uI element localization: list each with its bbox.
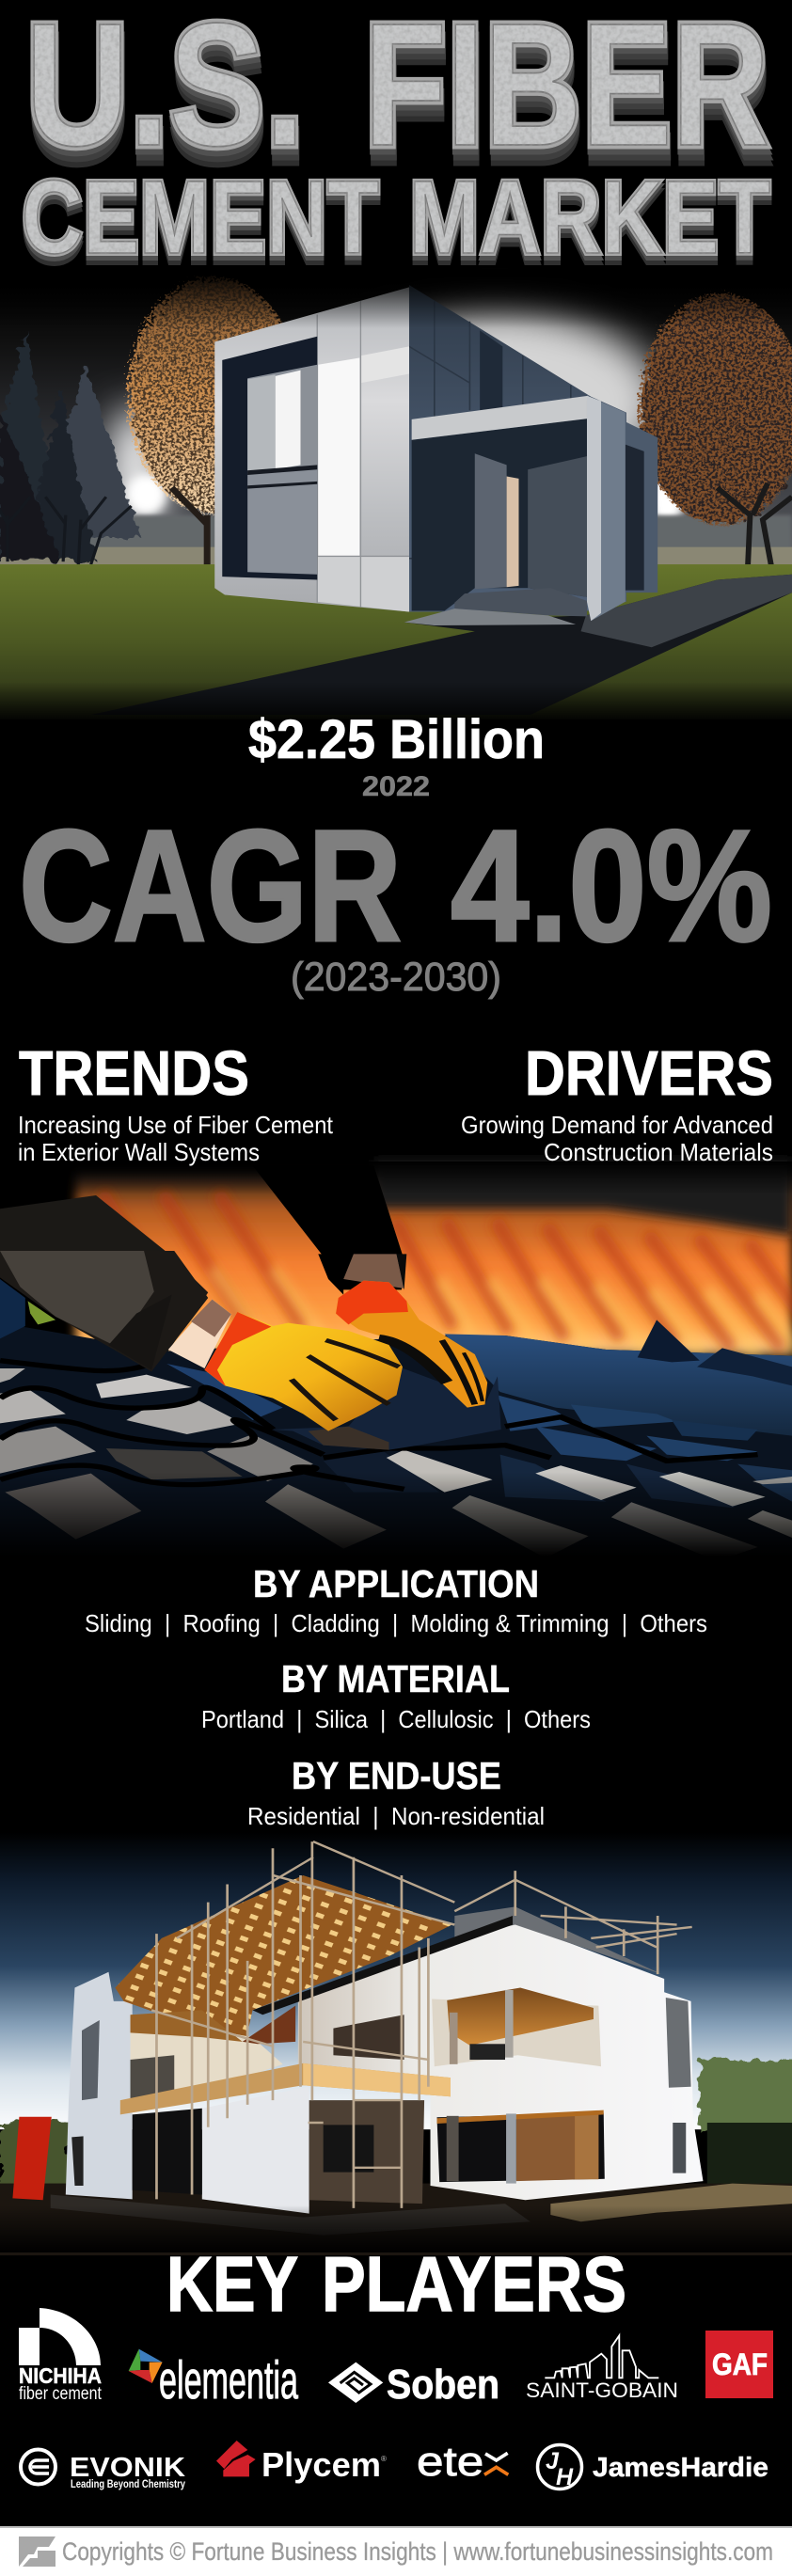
wooden roof lattice [115,1875,452,2044]
blue tiles [324,1395,792,1508]
segment: by material [201,1657,591,1733]
blue back roof [445,1334,792,1436]
porch interior [412,419,589,610]
top fade of roofer scene [0,1162,792,1194]
title line 1 [25,0,770,199]
logo: Plycem: ® [381,2455,387,2463]
key players heading: KEY [166,2240,298,2328]
logo: James Hardie: JamesHardie [593,2453,768,2483]
logo: Nichiha: fiber cement [19,2384,103,2404]
heading: BY END-USE [292,1754,501,1797]
right pillar [587,396,626,621]
title [22,0,770,285]
drivers block [461,1038,773,1166]
title line 2: CEMENT [22,160,379,276]
blue left scrap and hi-vis [0,1279,25,1338]
window glass [247,365,317,575]
main upper white mass [298,1922,704,2200]
logo: Evonik: Leading Beyond Chemistry [71,2479,185,2490]
light glow behind house [111,310,685,533]
scene: roofer with gloves [0,1161,792,1571]
logo: Evonik: EVONIK [70,2453,185,2483]
key players heading: PLAYERS [322,2240,626,2328]
title line 2 [22,160,770,285]
scene: fiber cement house [0,269,792,719]
window frame [222,337,317,580]
logo: James Hardie: H [556,2464,574,2490]
market size value: $2.25 Billion [248,709,545,770]
lower opening [437,2110,605,2184]
black tile wave lines [0,1361,758,1489]
center white panel [202,2087,309,2214]
drivers description [461,1111,773,1166]
items: Sliding | Roofing | Cladding | Molding & Trimming | Others [85,1609,707,1637]
ground [0,2184,792,2255]
sky [0,283,792,575]
key players heading [166,2240,626,2328]
top fade of scene [0,269,792,328]
right glove [336,1281,487,1408]
title line 2: CEMENT [22,165,379,280]
title line 1: U.S. [26,0,306,194]
mid interior [131,2006,404,2100]
segment: by end-use [247,1754,545,1830]
base year: 2022 [362,771,430,802]
logo: Etex: etex [417,2439,508,2485]
red panel [12,2117,52,2200]
drivers description: Growing Demand for Advanced [461,1111,773,1139]
blurred orange roof background [0,1161,792,1372]
blue side wall [409,285,626,611]
title line 2: CEMENT [22,160,379,276]
left orange tree [128,277,302,572]
right narrow windows [666,1998,691,2088]
ground trees [0,2060,792,2190]
trends description: Increasing Use of Fiber Cement [18,1111,334,1139]
trends heading: TRENDS [19,1038,249,1109]
left wrist [168,1300,231,1368]
canopy beam [412,396,589,440]
logo: Evonik [21,2449,185,2490]
bottom fade of building scene [0,2205,792,2252]
drivers description: Construction Materials [544,1138,773,1166]
lit tile highlights [0,1368,792,1561]
bare shrubs [0,497,132,565]
heading: BY MATERIAL [281,1657,510,1700]
CAGR value: CAGR [19,797,402,974]
logo: Nichiha [19,2308,103,2404]
door [475,453,507,589]
grass [0,564,792,719]
left sleeve close-up [0,1251,208,1371]
trends block [18,1038,334,1166]
items: Residential | Non-residential [247,1802,545,1830]
rear wing [626,421,657,593]
logo: Elementia: elementia [159,2350,298,2410]
logo: Plycem: Plycem [261,2445,381,2484]
items: Portland | Silica | Cellulosic | Others [201,1705,591,1733]
trends description: in Exterior Wall Systems [18,1138,260,1166]
trends description [18,1111,334,1166]
CAGR value [19,797,772,974]
segment: by application [85,1562,707,1637]
house body [214,285,657,625]
left conifers [0,328,141,561]
roof and hands close-up [0,1251,792,1571]
center opening [309,2100,424,2204]
left glove [204,1312,403,1431]
logo: James Hardie [538,2445,768,2490]
scaffolding [151,1841,692,2208]
sky [0,1833,792,2129]
logo: Soben: Soben [387,2362,499,2408]
logo: Saint-Gobain: SAINT-GOBAIN [526,2378,678,2402]
logo: Plycem [216,2441,387,2484]
logo: Saint-Gobain [526,2335,678,2402]
footer band [0,2526,792,2576]
right tree [639,294,792,575]
bright stripe highlights [156,1268,792,1357]
bottom fade of house scene [0,682,792,724]
logo: GAF [705,2331,773,2398]
balcony wood band [120,2063,451,2114]
upper right sleeve [252,1165,405,1289]
distant field [0,515,792,565]
bottom fade of roofer scene [0,1472,792,1557]
title line 1: U.S. [26,5,306,199]
upper opening [432,1988,601,2066]
roof parapet [454,1906,661,1974]
white front face [214,287,409,611]
logo: James Hardie: J [546,2448,560,2474]
logo: Nichiha: NICHIHA [19,2363,102,2388]
under balcony dark [133,2109,202,2195]
left block [66,1972,133,2199]
footer logo [19,2536,55,2567]
dark roof edge [252,1916,513,2015]
right wrist [318,1254,406,1295]
path [91,575,792,715]
hand device [273,1367,501,1450]
forecast period: (2023-2030) [291,955,501,1000]
roof base [0,1323,792,1571]
upper left sleeve [0,1195,208,1372]
steps [454,588,587,616]
title line 2: CEMENT [22,169,379,285]
logo: Soben [328,2362,499,2408]
scene: building under construction [0,1833,792,2255]
logo: Elementia [129,2349,298,2410]
logo: GAF: GAF [712,2347,768,2381]
heading: BY APPLICATION [253,1562,539,1605]
